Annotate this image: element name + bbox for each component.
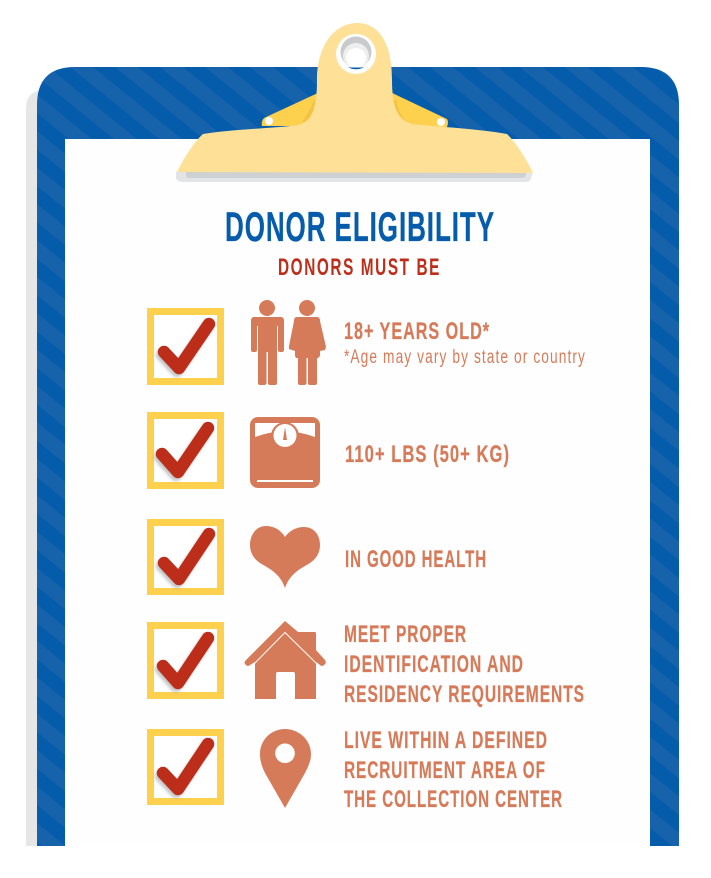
text: location requirement: THE COLLECTION CENTER [344,786,563,813]
text: age footnote: *Age may vary by state or country [344,347,586,368]
right clip wing [380,92,448,127]
checkbox [150,416,220,486]
icon: house [244,621,326,699]
text: age requirement: 18+ YEARS OLD* [344,318,490,345]
row 5: location [150,727,563,813]
row 2: weight [150,416,510,488]
left wing inner shade [302,100,325,122]
paper sheet [65,139,650,846]
title: DONOR ELIGIBILITY [225,203,495,250]
text: location requirement: LIVE WITHIN A DEFINED [344,727,548,754]
text: identification requirement: MEET PROPER [344,621,467,648]
checkbox [150,312,220,382]
left wing rivet [265,117,273,125]
text: identification requirement: IDENTIFICATION AND [344,651,524,678]
clip body [177,23,533,173]
board shadow [26,90,60,846]
clip hole [336,34,376,74]
subtitle: DONORS MUST BE [278,254,441,281]
icon: scale [250,417,320,488]
clip outer shadow [176,172,533,182]
checkbox [150,732,220,802]
text: weight requirement: 110+ LBS (50+ KG) [345,441,510,468]
text: location requirement [344,727,563,813]
clip inner shadow [186,172,526,178]
icon: man and woman [251,300,326,385]
icon: heart [250,526,320,588]
text: location requirement: RECRUITMENT AREA OF [344,757,546,784]
checkbox [150,626,220,696]
clip [176,23,533,182]
right wing inner shade [385,100,406,122]
text: identification requirement [344,621,585,708]
row 1: age [150,300,586,385]
text: health requirement: IN GOOD HEALTH [345,546,487,573]
left clip wing [262,92,330,126]
icon: map pin [260,729,311,808]
row 3: health [150,522,487,592]
checkbox [150,522,220,592]
right wing rivet [437,118,445,126]
row 4: identification [150,621,585,708]
